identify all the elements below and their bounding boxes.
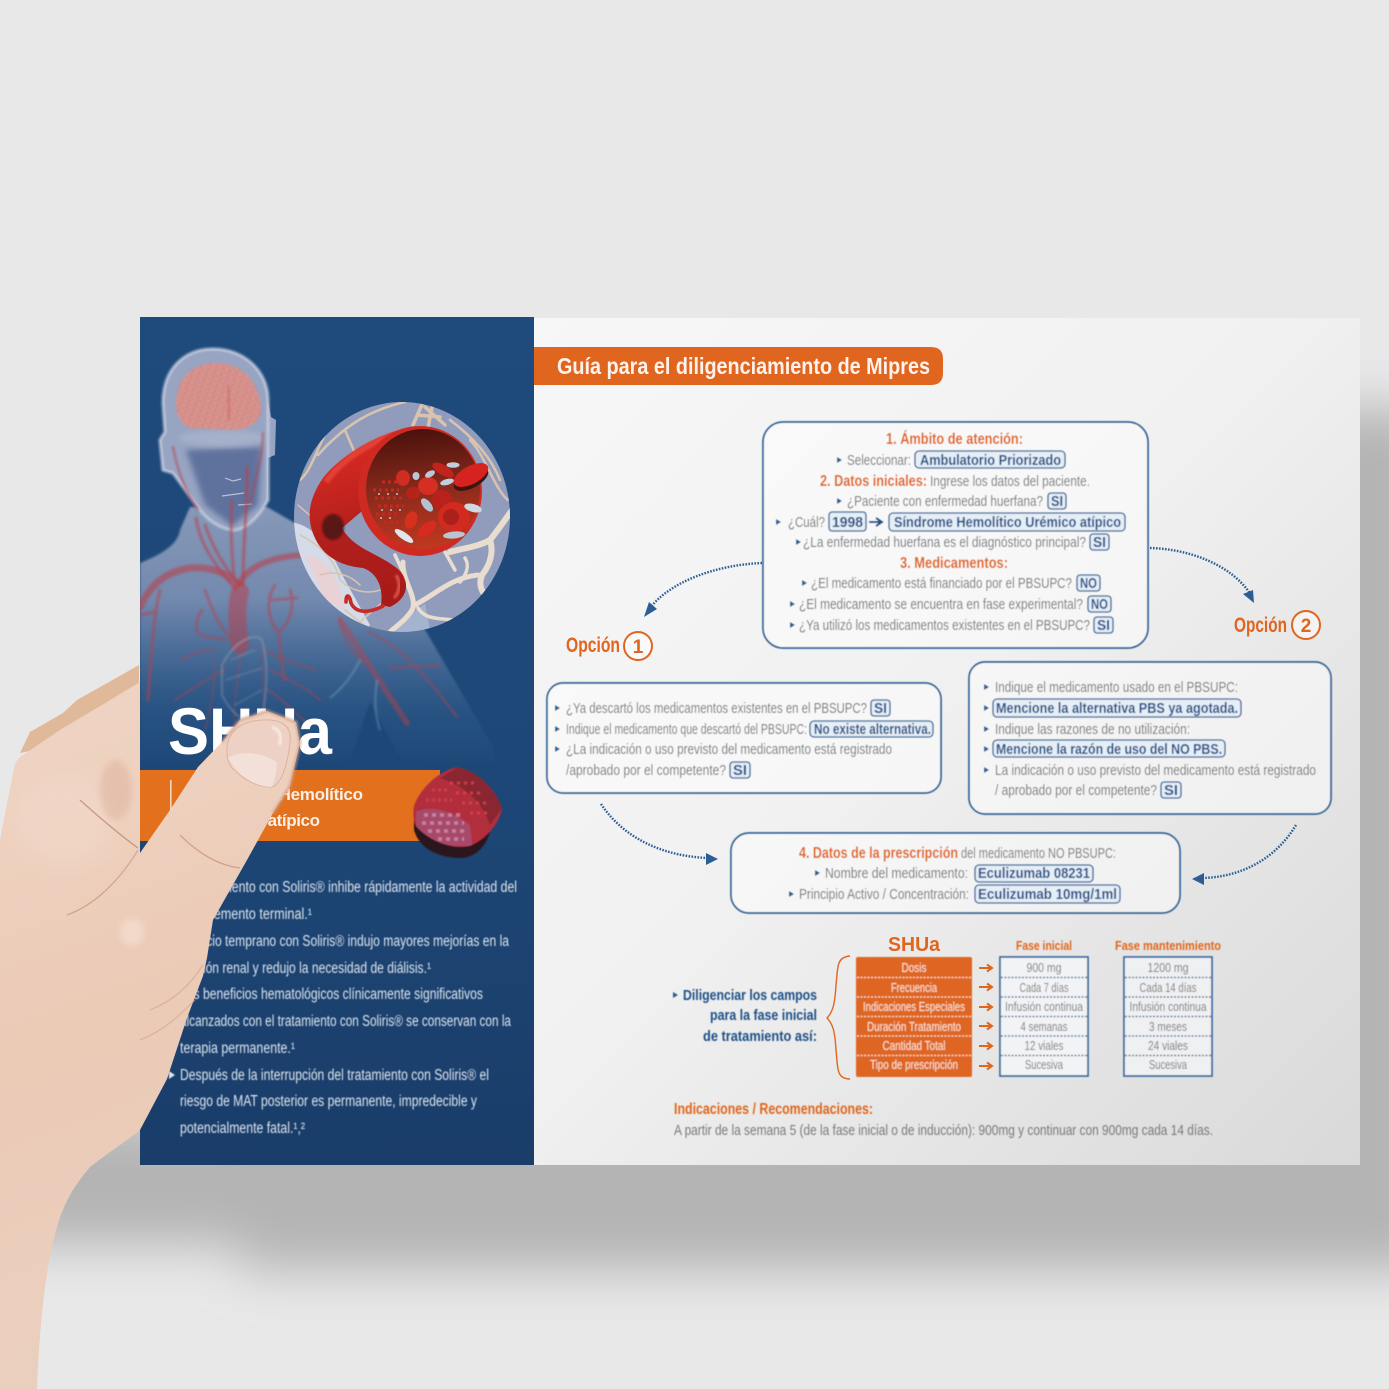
label: opción 2: 2 <box>1301 616 1311 637</box>
table: fase inicial <box>1000 939 1088 1076</box>
panel: pasos 1 a 3: 3. Medicamentos: <box>900 555 1008 572</box>
text: diligenciar los campos: para la fase inicial <box>710 1007 817 1024</box>
text: indicaciones y recomendaciones <box>674 1101 1213 1139</box>
left panel body text: función renal y redujo la necesidad de diálisis.¹ <box>180 960 431 977</box>
table: fase inicial: 900 mg <box>1026 961 1062 975</box>
panel: pasos 1 a 3: 1998 <box>832 514 863 531</box>
panel: opción 2: Indique las razones de no utilización: <box>995 721 1190 738</box>
panel: opción 1: SI <box>733 762 747 779</box>
left panel body text: El tratamiento con Soliris® inhibe rápidamente la actividad del <box>180 879 517 896</box>
table: fase mantenimiento: 1200 mg <box>1148 961 1189 975</box>
brain <box>175 362 262 431</box>
left panel body text: terapia permanente.¹ <box>180 1040 295 1057</box>
heading: SHUa dosing: SHUa <box>888 934 941 956</box>
panel: opción 1: Indique el medicamento que descartó del PBSUPC: <box>566 721 807 738</box>
panel: pasos 1 a 3: NO <box>1080 575 1097 592</box>
panel: opción 1: No existe alternativa. <box>814 721 931 738</box>
panel: paso 4 prescripción: del medicamento NO PBSUPC: <box>961 845 1116 862</box>
panel: opción 1 <box>547 683 941 793</box>
capillary network <box>298 402 512 632</box>
arrow to opción 2 <box>1150 548 1254 603</box>
panel: opción 1: /aprobado por el competente? <box>566 762 726 779</box>
panel: opción 2: Mencione la razón de uso del NO PBS. <box>996 741 1222 758</box>
left panel body text: alcanzados con el tratamiento con Soliris® se conservan con la <box>180 1013 511 1030</box>
label: opción 1: 1 <box>633 637 644 658</box>
label: opción 1: Opción <box>566 634 620 657</box>
panel: pasos 1 a 3: SI <box>1051 493 1063 510</box>
panel: pasos 1 a 3: 2. Datos iniciales: <box>820 473 927 490</box>
magnified blood vessel circle <box>290 402 512 640</box>
panel: pasos 1 a 3: 1. Ámbito de atención: <box>886 431 1023 448</box>
card shadow <box>0 410 1389 1270</box>
left panel body text: potencialmente fatal.¹,² <box>180 1120 305 1137</box>
panel: paso 4 prescripción: Nombre del medicamento: <box>825 865 968 882</box>
panel: opción 1: ¿Ya descartó los medicamentos existentes en el PBSUPC? <box>566 700 867 717</box>
table: fase inicial: Sucesiva <box>1025 1058 1063 1072</box>
text: diligenciar los campos: de tratamiento así: <box>703 1028 817 1045</box>
table: fase inicial: Fase inicial <box>1016 939 1072 953</box>
panel: paso 4 prescripción: Eculizumab 10mg/1ml <box>978 886 1117 903</box>
arrows: campos to values <box>979 964 992 1070</box>
orange band with disease name <box>140 770 440 841</box>
blood cells <box>373 458 492 545</box>
panel: paso 4 prescripción: Principio Activo / Concentración: <box>799 886 969 903</box>
panel: pasos 1 a 3: ¿El medicamento se encuentra en fase experimental? <box>799 596 1083 613</box>
table: fase inicial: Infusión continua <box>1005 1000 1083 1014</box>
head <box>160 349 276 530</box>
table: campos: Duración Tratamiento <box>867 1020 961 1034</box>
figure: human body with vessels <box>140 346 476 732</box>
table: campos: Cantidad Total <box>882 1039 946 1053</box>
table: fase inicial: Cada 7 días <box>1020 981 1068 995</box>
panel: paso 4 prescripción: Eculizumab 08231 <box>978 865 1090 882</box>
panel: pasos 1 a 3: ¿Ya utilizó los medicamentos existentes en el PBSUPC? <box>799 617 1090 634</box>
table: campos: Frecuencia <box>891 981 937 995</box>
panel: pasos 1 a 3: ¿Paciente con enfermedad huerfana? <box>847 493 1043 510</box>
panel: pasos 1 a 3: ¿Cuál? <box>788 514 825 531</box>
panel: opción 2 <box>969 662 1331 814</box>
hand holding the card <box>0 665 300 1389</box>
orange band with disease name: Síndrome Hemolítico <box>198 785 363 804</box>
panel: pasos 1 a 3: ¿El medicamento está financiado por el PBSUPC? <box>811 575 1072 592</box>
orange band with disease name: Urémico atípico <box>198 811 320 830</box>
table: campos <box>856 957 972 1077</box>
card left panel <box>140 317 534 1165</box>
panel: pasos 1 a 3: SI <box>1097 617 1110 634</box>
table: fase mantenimiento <box>1115 939 1221 1076</box>
thumbnail <box>227 720 290 787</box>
panel: opción 2: / aprobado por el competente? <box>995 782 1157 799</box>
text: diligenciar los campos: Diligenciar los campos <box>683 987 817 1004</box>
panel: opción 1: SI <box>874 700 887 717</box>
table: fase mantenimiento: 3 meses <box>1149 1020 1187 1034</box>
table: fase mantenimiento: Fase mantenimiento <box>1115 939 1221 953</box>
heading: guía: Guía para el diligenciamiento de Mipres <box>557 353 930 379</box>
panel: pasos 1 a 3: ¿La enfermedad huerfana es el diagnóstico principal? <box>803 534 1086 551</box>
left panel body text: Después de la interrupción del tratamiento con Soliris® el <box>180 1067 489 1084</box>
panel: opción 1: ¿La indicación o uso previsto del medicamento está registrado <box>566 741 892 758</box>
left panel body text: Los beneficios hematológicos clínicamente significativos <box>180 986 483 1003</box>
hand shading <box>17 711 300 1040</box>
text: diligenciar los campos <box>673 987 817 1045</box>
arrow from opción 2 to paso 4 <box>1192 825 1296 885</box>
label: opción 2: Opción <box>1234 614 1287 637</box>
panel: pasos 1 a 3: NO <box>1091 596 1108 613</box>
panel: paso 4 prescripción: 4. Datos de la prescripción <box>799 845 958 862</box>
panel: pasos 1 a 3: Seleccionar: <box>847 452 911 469</box>
table: campos: Indicaciones Especiales <box>863 1000 965 1014</box>
panel: pasos 1 a 3 <box>763 422 1148 648</box>
table: fase mantenimiento: Cada 14 días <box>1140 981 1196 995</box>
table: fase mantenimiento: Sucesiva <box>1149 1058 1187 1072</box>
panel: pasos 1 a 3: Ingrese los datos del paciente. <box>930 473 1090 490</box>
label: opción 2 <box>1234 611 1320 639</box>
table: campos: Dosis <box>902 961 926 975</box>
light arm area <box>294 522 430 632</box>
panel: opción 2: Mencione la alternativa PBS ya agotada. <box>996 700 1238 717</box>
panel: pasos 1 a 3: Síndrome Hemolítico Urémico atípico <box>894 514 1121 531</box>
text: indicaciones y recomendaciones: Indicaciones / Recomendaciones: <box>674 1101 873 1118</box>
arrow to opción 1 <box>644 563 762 617</box>
icon: vessel section <box>413 767 502 858</box>
arrow from opción 1 to paso 4 <box>601 804 718 865</box>
panel: paso 4 prescripción <box>731 833 1180 913</box>
left panel body text: complemento terminal.¹ <box>180 906 312 923</box>
table: campos: Tipo de prescripción <box>870 1058 958 1072</box>
heading: guía <box>534 347 943 385</box>
title SHUa: SHUa <box>168 694 333 768</box>
red vessel funnel <box>310 426 482 611</box>
panel: pasos 1 a 3: Ambulatorio Priorizado <box>920 452 1061 469</box>
text: indicaciones y recomendaciones: A partir de la semana 5 (de la fase inicial o de inducción): 900mg y continuar con 900mg cada 14 días. <box>674 1122 1213 1139</box>
brace <box>827 956 850 1079</box>
panel: pasos 1 a 3: SI <box>1093 534 1106 551</box>
left panel body text: riesgo de MAT posterior es permanente, impredecible y <box>180 1093 477 1110</box>
panel: opción 2: SI <box>1164 782 1178 799</box>
table: fase inicial: 4 semanas <box>1020 1020 1068 1034</box>
label: opción 1 <box>566 632 652 660</box>
left panel body text: El inicio temprano con Soliris® indujo mayores mejorías en la <box>180 933 509 950</box>
card right panel <box>534 318 1360 1165</box>
panel: opción 2: Indique el medicamento usado en el PBSUPC: <box>995 679 1238 696</box>
vessels <box>140 433 457 730</box>
table: fase mantenimiento: 24 viales <box>1148 1039 1188 1053</box>
table: fase inicial: 12 viales <box>1024 1039 1064 1053</box>
table: fase mantenimiento: Infusión continua <box>1130 1000 1207 1014</box>
left panel body text <box>169 879 517 1137</box>
